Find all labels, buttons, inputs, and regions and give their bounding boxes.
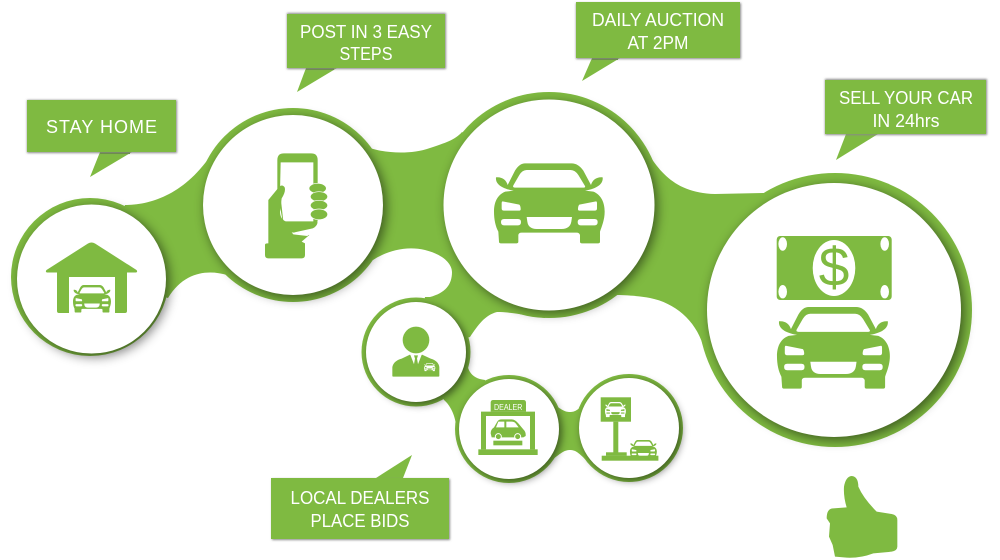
callout: post in 3 easy steps: POST IN 3 EASY [300,22,432,42]
callout: sell your car [825,79,987,160]
callout: local dealers [271,455,450,540]
panel: step stay home [17,204,170,357]
panel: step post [203,115,386,298]
callout: daily auction: AT 2PM [628,33,688,53]
panel: step dealer person [366,302,469,405]
icon: garage with car [46,242,137,313]
callout: sell your car: SELL YOUR CAR [839,88,973,108]
green connector network [11,92,972,483]
callout: post in 3 easy steps: STEPS [340,44,392,64]
panel: step dealership [459,379,562,482]
callout: local dealers: LOCAL DEALERS [290,488,430,508]
panel: step daily auction [444,100,658,314]
panel: step sell car [707,183,964,440]
callout: sell your car: IN 24hrs [872,111,940,131]
callout: daily auction [576,2,741,81]
panel: step car lot sign [579,378,682,481]
icon: dollar bill: $ [819,236,849,298]
callout: local dealers: PLACE BIDS [310,511,410,531]
icon: sign and car [601,397,658,461]
callout: stay home [27,100,177,177]
icon: dealer person [392,327,439,377]
callout: daily auction: DAILY AUCTION [592,10,724,30]
callout: stay home: STAY HOME [46,117,157,137]
icon: car front [777,307,890,389]
callout: post in 3 easy steps [287,13,446,92]
icon: dollar bill [777,236,892,300]
icon: car front [494,163,605,243]
icon: thumbs up [827,476,897,558]
icon: hand holding phone [265,153,328,258]
icon: dealer building: DEALER [494,402,522,412]
